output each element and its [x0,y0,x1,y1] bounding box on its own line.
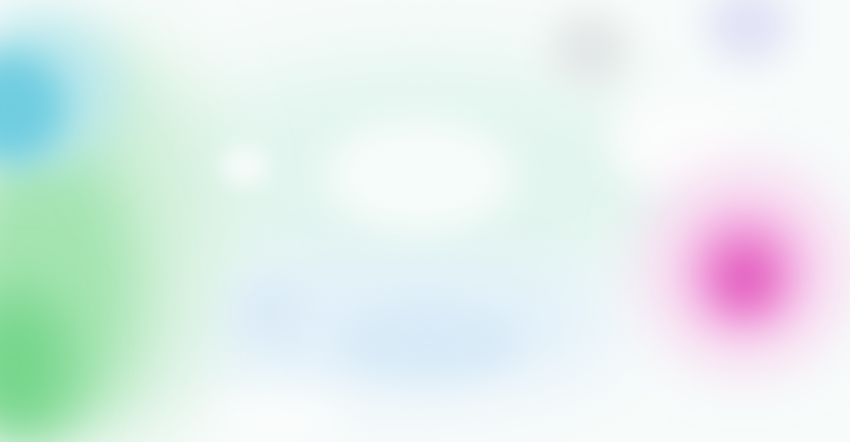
lavender blob top right [706,0,790,63]
pale cyan upper-left halo [0,15,118,165]
magenta core [717,247,773,307]
white highlight right [610,85,750,195]
small white highlight [221,146,269,186]
saturated green lower-left [0,289,70,441]
magenta mid glow [690,214,800,330]
pale green left halo [20,40,210,440]
grey blob top [552,14,628,86]
white highlight bottom [215,399,345,441]
mint central wash [140,55,700,305]
green glow left [0,130,135,440]
pink outer halo [645,168,845,368]
blue blob lower left [238,278,306,346]
pale blue lower wash [180,260,620,390]
blue ellipse lower centre [338,306,522,378]
teal-blue glow upper-left [0,53,65,163]
white highlight centre [325,117,515,233]
